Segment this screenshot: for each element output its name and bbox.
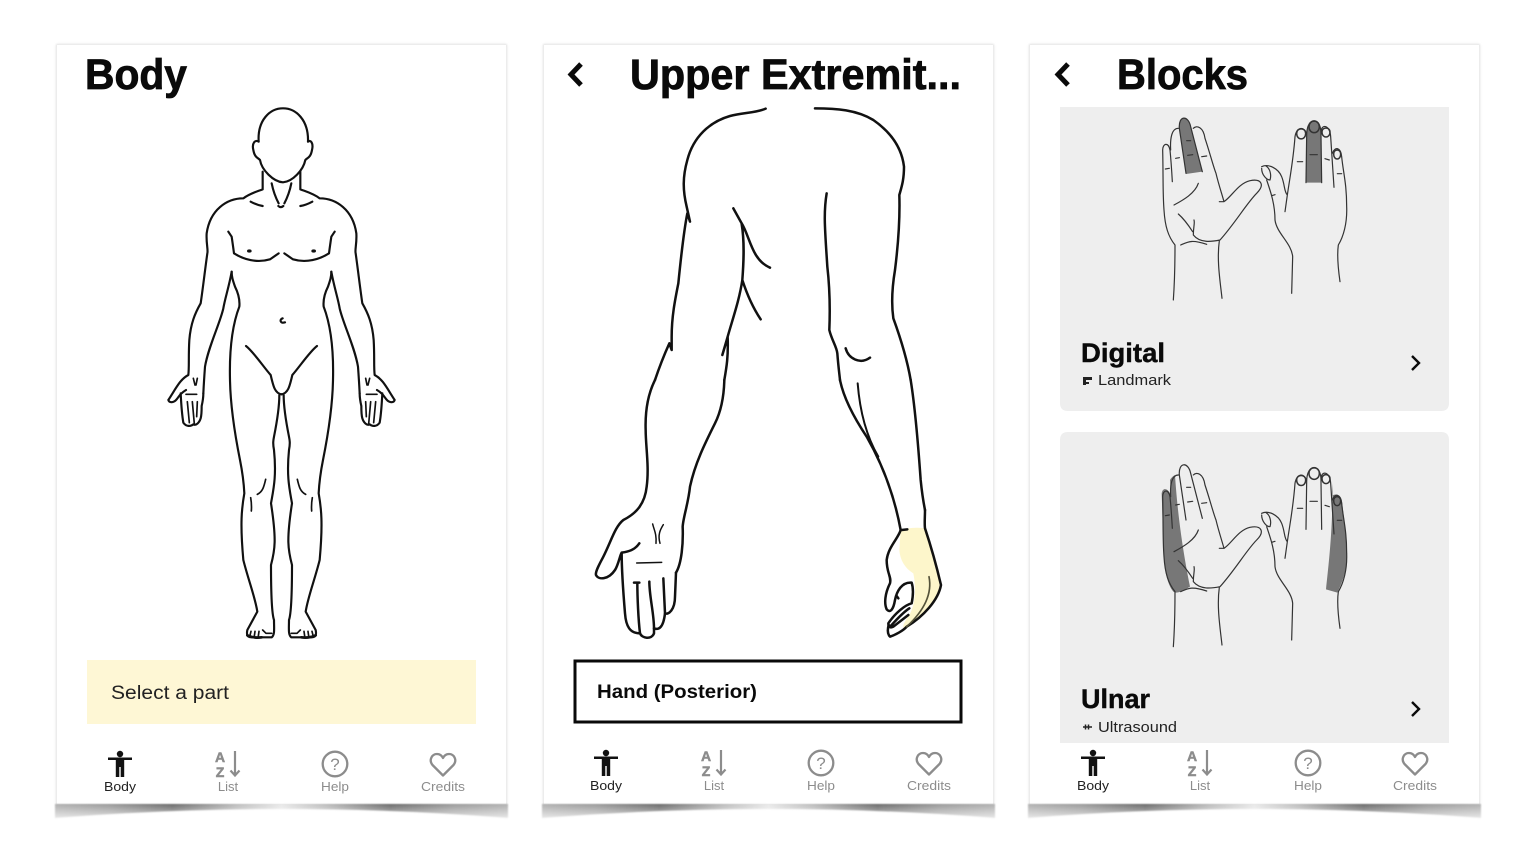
illustration: hands with shaded ulnar side [1162, 465, 1347, 647]
nav icon: Body active: Body [1077, 778, 1110, 793]
nav icon: List: List [1190, 778, 1211, 793]
nav icon: Help: Help [1294, 778, 1322, 793]
card: Digital block [1060, 107, 1449, 411]
nav icon: Credits [907, 753, 952, 793]
nav icon: Help: Help [321, 779, 349, 794]
nav icon: Body active [590, 750, 623, 793]
nav icon: Body active [1077, 750, 1110, 793]
icon: back chevron [571, 64, 581, 85]
nav icon: List [701, 748, 726, 793]
card: Ulnar block [1060, 432, 1449, 743]
illustration: hands with shaded middle finger [1163, 118, 1347, 300]
heading: Upper Extremity: Upper Extremit... [630, 51, 961, 99]
text: Digital: Digital [1081, 338, 1165, 368]
prompt box: Select a part [87, 660, 476, 724]
nav icon: Credits: Credits [421, 779, 466, 794]
nav icon: List: List [704, 778, 725, 793]
text: Ulnar: Ulnar [1081, 684, 1150, 714]
panel: Upper Extremity screen [540, 45, 997, 820]
icon: chevron [1412, 702, 1419, 716]
body figure illustration [168, 108, 395, 638]
nav icon: Help [807, 751, 835, 793]
prompt box: Select a part: Select a part [111, 683, 230, 704]
nav icon: Body active [104, 751, 137, 794]
nav icon: Help: Help [807, 778, 835, 793]
nav icon: Credits [1393, 753, 1438, 793]
icon: back chevron [1058, 64, 1068, 85]
heading: Body: Body [85, 51, 187, 99]
nav icon: Credits [421, 754, 466, 794]
text: Ultrasound: Ultrasound [1098, 719, 1177, 736]
nav icon: List: List [218, 779, 239, 794]
panel: Body screen [53, 45, 510, 820]
icon: landmark [1083, 377, 1092, 385]
nav icon: Help [321, 752, 349, 794]
nav icon: Credits: Credits [1393, 778, 1438, 793]
text: Landmark: Landmark [1098, 372, 1172, 389]
icon: chevron [1412, 356, 1419, 370]
nav icon: Body active: Body [590, 778, 623, 793]
heading: Blocks: Blocks [1117, 51, 1248, 99]
icon: ultrasound [1083, 724, 1092, 730]
nav icon: Body active: Body [104, 779, 137, 794]
nav icon: List [215, 749, 240, 794]
panel: Blocks screen [1026, 45, 1483, 820]
selected part box: Hand (Posterior) [575, 661, 961, 722]
nav icon: Credits: Credits [907, 778, 952, 793]
nav icon: Help [1294, 751, 1322, 793]
arm illustration with highlighted hand [596, 108, 941, 638]
nav icon: List [1187, 748, 1212, 793]
selected part box: Hand (Posterior): Hand (Posterior) [597, 682, 757, 703]
highlighted hand [885, 510, 941, 637]
